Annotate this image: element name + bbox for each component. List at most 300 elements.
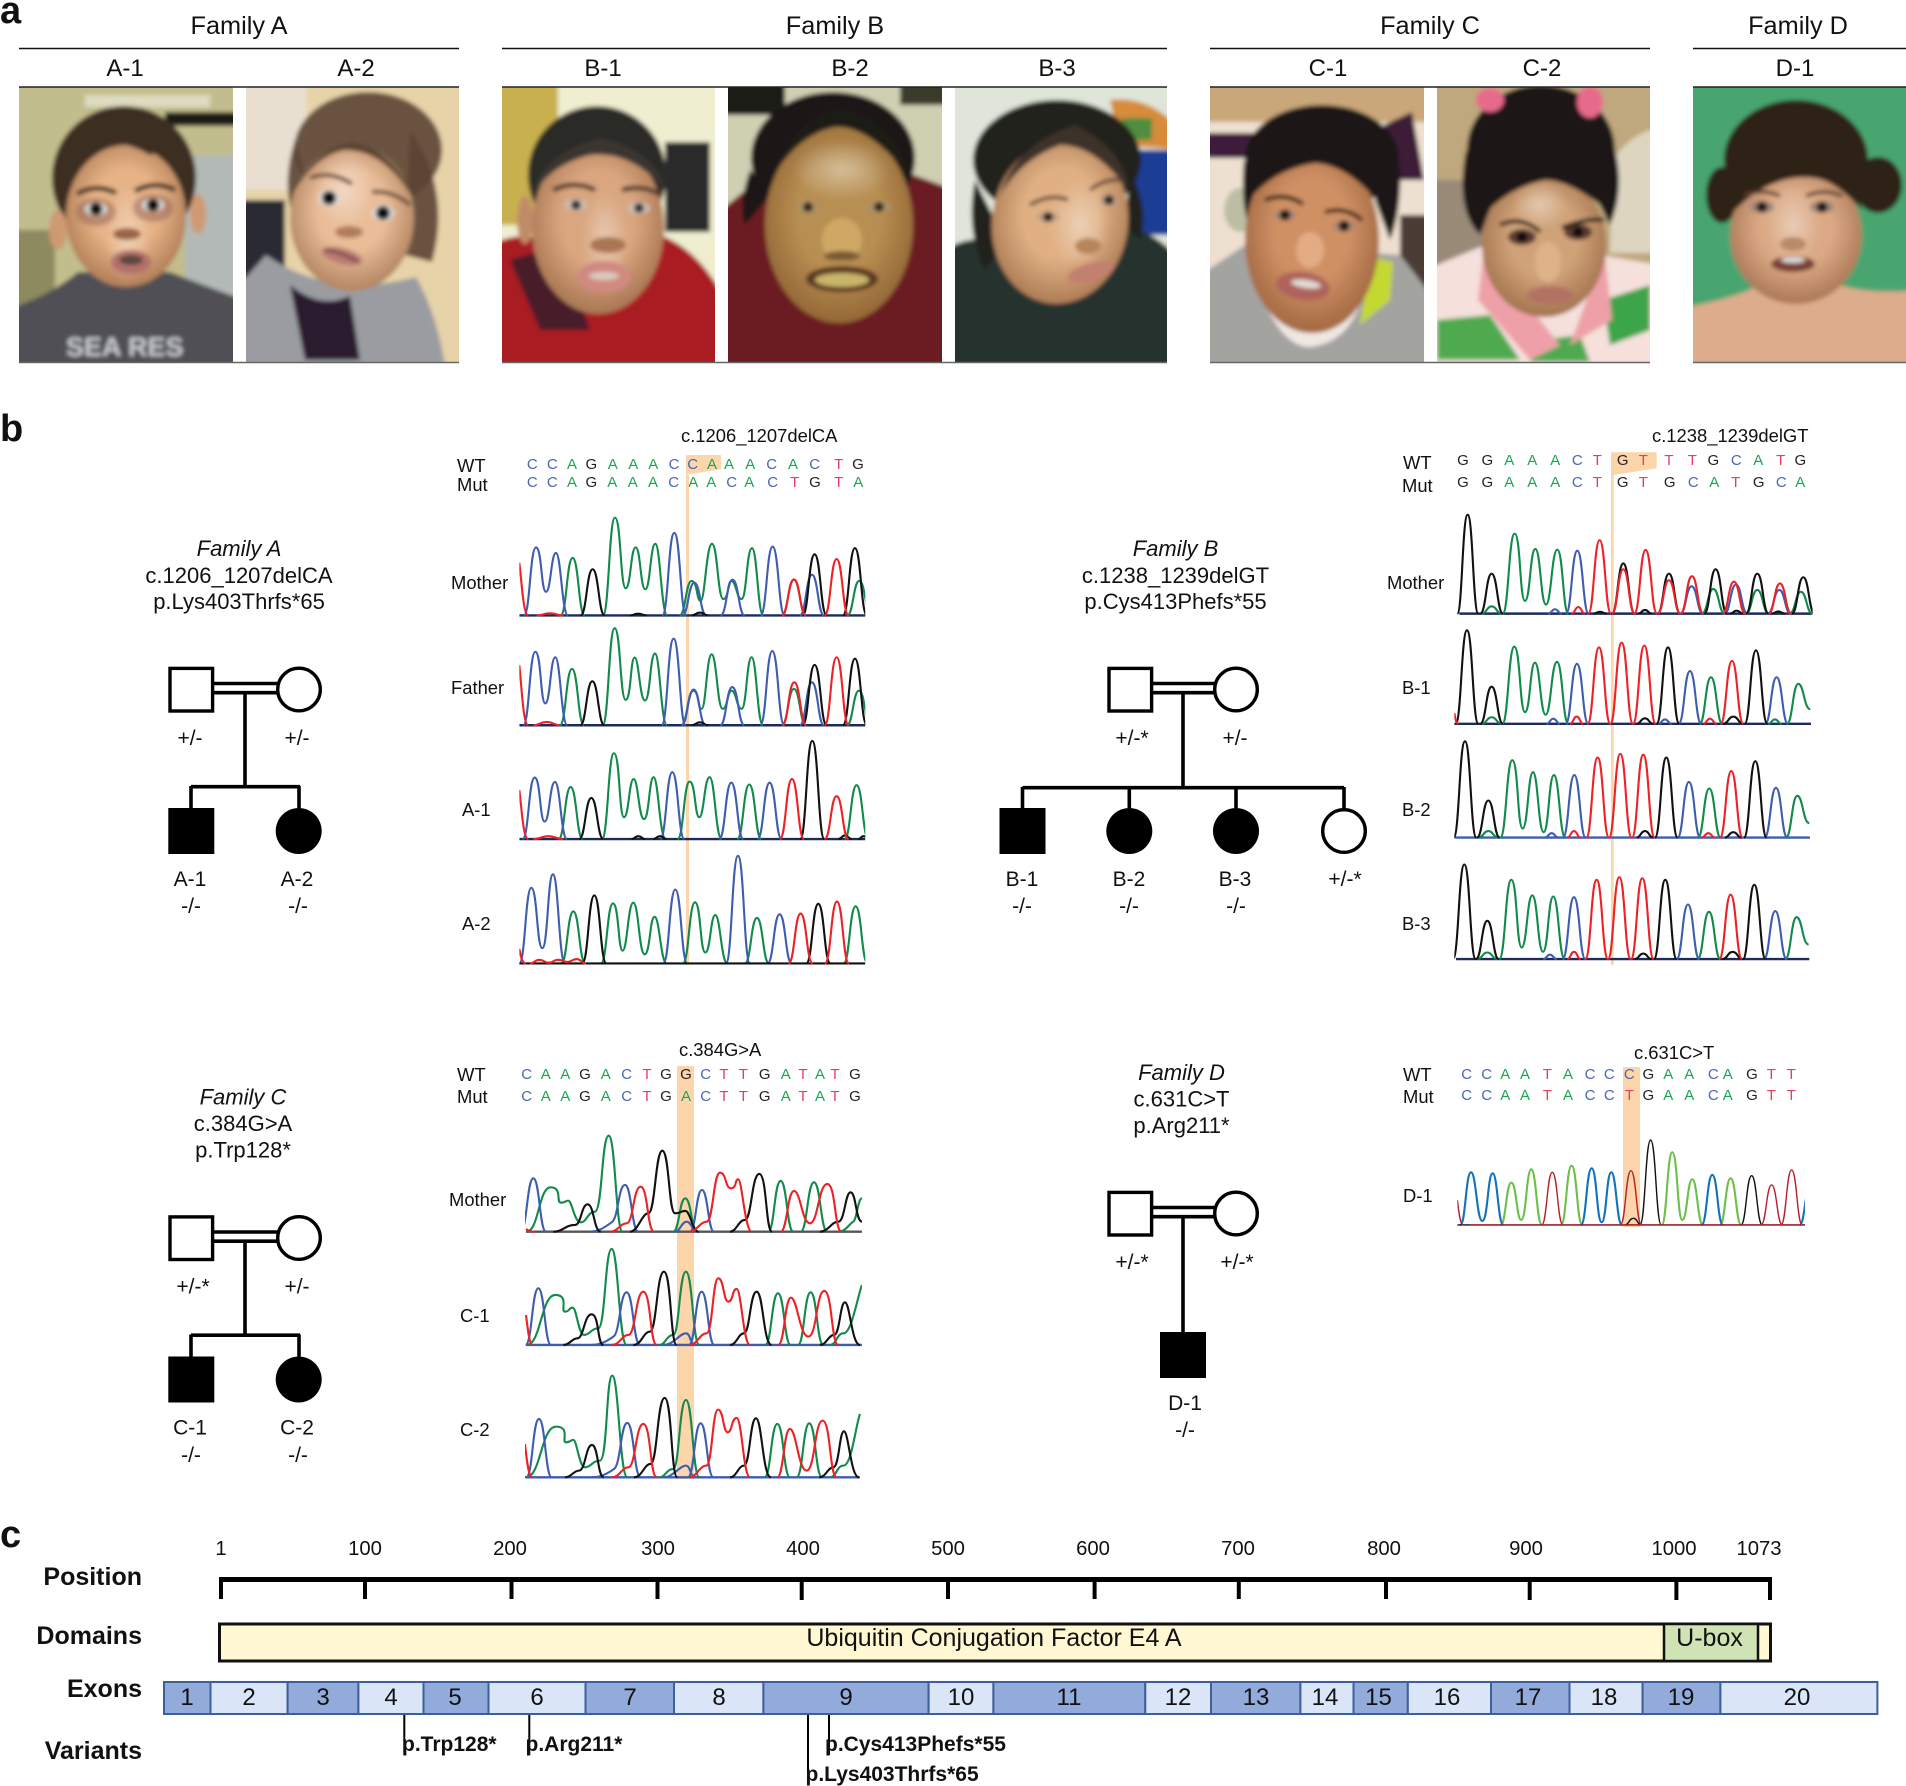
sequence alignment: Family A: G <box>852 456 864 473</box>
sequence alignment: Family A: A <box>648 474 658 491</box>
sequence alignment: Family A: A <box>788 456 798 473</box>
sequence alignment: Family C: G <box>680 1066 692 1083</box>
sequence alignment: Family D: T <box>1787 1066 1796 1083</box>
exon bar: 14 <box>1312 1684 1338 1711</box>
sequence alignment: Family D: Mut <box>1403 1086 1434 1107</box>
sequence alignment: Family C: G <box>849 1066 861 1083</box>
sequence alignment: Family A: A <box>688 474 698 491</box>
sequence alignment: Family C: G <box>759 1066 771 1083</box>
mutation text: Family B: c.1238_1239delGT <box>1082 563 1269 588</box>
sequence alignment: Family C: C <box>521 1066 532 1083</box>
pedigree: Family D: D-1 <box>1168 1392 1202 1415</box>
sequence alignment: Family C: C <box>700 1088 711 1105</box>
pedigree: Family C: +/- <box>284 1276 310 1298</box>
pedigree: Family A: +/- <box>177 727 203 750</box>
exon bar: 1 <box>180 1684 194 1711</box>
sequence alignment: Family A: C <box>547 474 558 491</box>
trace labels: Family A: A-1 <box>462 799 491 820</box>
sequence alignment: Family A <box>457 425 864 495</box>
pedigree: Family C: -/- <box>288 1444 308 1467</box>
exon bar: 20 <box>1784 1684 1810 1711</box>
variant: p.Cys413Phefs*55: p.Cys413Phefs*55 <box>825 1733 1006 1756</box>
highlight strip: Family D <box>1623 1067 1640 1227</box>
sequence alignment: Family D: T <box>1767 1066 1776 1083</box>
heading: Family C: Family C <box>1380 12 1480 40</box>
position ruler: 800 <box>1367 1538 1401 1560</box>
sequence alignment: Family B: T <box>1688 452 1697 469</box>
sequence alignment: Family A: C <box>547 456 558 473</box>
position ruler: 1073 <box>1736 1538 1782 1560</box>
pedigree: Family B: B-3 <box>1219 868 1251 891</box>
sequence alignment: Family A: C <box>527 456 538 473</box>
mutation text: Family D <box>1133 1060 1230 1138</box>
individual labels <box>106 55 1814 82</box>
position ruler: 100 <box>348 1538 382 1560</box>
variant: p.Arg211* <box>526 1715 623 1756</box>
sequence alignment: Family A: A <box>607 474 617 491</box>
variant: p.Trp128* <box>402 1715 497 1756</box>
highlight strip: Family B <box>1611 475 1614 965</box>
individual labels: C-2 <box>1523 55 1561 82</box>
sequence alignment: Family D: C <box>1585 1066 1596 1083</box>
sequence alignment: Family C: C <box>621 1066 632 1083</box>
panel b: pedigrees and chromatograms <box>0 408 1815 1479</box>
exon bar: 4 <box>384 1684 398 1711</box>
mutation text: Family B: Family B <box>1133 536 1218 561</box>
sequence alignment: Family D: c.631C>T <box>1634 1042 1714 1063</box>
sequence alignment: Family C: G <box>849 1088 861 1105</box>
position ruler: 700 <box>1221 1538 1255 1560</box>
individual labels: C-1 <box>1309 55 1347 82</box>
exon bar: 8 <box>712 1684 726 1711</box>
position ruler: 300 <box>641 1538 675 1560</box>
mutation text: Family A: p.Lys403Thrfs*65 <box>153 589 325 614</box>
trace: B-2 <box>1454 741 1810 838</box>
pedigree: Family A: A-2 <box>281 868 313 891</box>
sequence alignment: Family A: A <box>648 456 658 473</box>
position ruler: 600 <box>1076 1538 1110 1560</box>
sequence alignment: Family B: c.1238_1239delGT <box>1652 425 1808 447</box>
heading: Family B: Family B <box>786 12 884 40</box>
sequence alignment: Family C: T <box>798 1088 808 1105</box>
sequence alignment: Family D: A <box>1500 1066 1510 1083</box>
trace labels: Family C <box>449 1189 506 1440</box>
sequence alignment: Family A: A <box>567 456 577 473</box>
sequence alignment: Family B: C <box>1731 452 1742 469</box>
pedigree: Family B: -/- <box>1226 895 1246 918</box>
sequence alignment: Family A: T <box>834 474 843 491</box>
heading: Family A: Family A <box>190 12 288 40</box>
pedigree: Family D <box>1109 1192 1257 1442</box>
sequence alignment: Family C: A <box>560 1088 570 1105</box>
mutation text: Family B <box>1082 536 1269 614</box>
sequence alignment: Family A: A <box>744 474 754 491</box>
heading: Family D: Family D <box>1748 12 1848 40</box>
sequence alignment: Family D: T <box>1625 1087 1634 1104</box>
pedigree: Family A: -/- <box>181 895 201 918</box>
sequence alignment: Family A: WT <box>457 455 486 476</box>
sequence alignment: Family D: WT <box>1403 1064 1432 1085</box>
sequence alignment: Family D: A <box>1520 1066 1530 1083</box>
sequence alignment: Family D: C <box>1461 1087 1472 1104</box>
position ruler <box>215 1538 1782 1600</box>
sequence alignment: Family B: T <box>1639 474 1648 491</box>
exon bar: 19 <box>1668 1684 1694 1711</box>
sequence alignment: Family C: C <box>700 1066 711 1083</box>
sequence alignment: Family D: A <box>1563 1066 1573 1083</box>
pedigree: Family C <box>168 1217 322 1467</box>
sequence alignment: Family C: T <box>798 1066 808 1083</box>
sequence alignment: Family B: G <box>1617 452 1629 469</box>
sequence alignment: Family D: T <box>1787 1087 1796 1104</box>
trace: B-3 <box>1453 864 1809 959</box>
sequence alignment: Family C: T <box>830 1066 840 1083</box>
sequence alignment: Family A: C <box>766 456 777 473</box>
sequence alignment: Family D: A <box>1723 1087 1733 1104</box>
sequence alignment: Family B: A <box>1753 452 1763 469</box>
sequence alignment: Family C: T <box>642 1088 652 1105</box>
sequence alignment: Family C: WT <box>457 1064 486 1085</box>
trace: B-1 <box>1454 630 1811 724</box>
sequence alignment: Family C: T <box>739 1066 748 1083</box>
sequence alignment: Family C: A <box>781 1088 791 1105</box>
sequence alignment: Family B: C <box>1776 474 1787 491</box>
sequence alignment: Family D: A <box>1563 1087 1573 1104</box>
variant: p.Arg211*: p.Arg211* <box>526 1733 623 1756</box>
sequence alignment: Family A: A <box>706 474 716 491</box>
trace labels: Family A: Mother <box>451 572 508 593</box>
sequence alignment: Family B: G <box>1664 474 1676 491</box>
trace labels: Family B: B-3 <box>1402 913 1431 934</box>
sequence alignment: Family C: T <box>642 1066 652 1083</box>
pedigree: Family B: -/- <box>1119 895 1139 918</box>
position ruler: 500 <box>931 1538 965 1560</box>
trace: C-1 <box>526 1249 862 1345</box>
individual labels: B-2 <box>831 55 869 82</box>
sequence alignment: Family B: T <box>1593 452 1602 469</box>
sequence alignment: Family D: A <box>1500 1087 1510 1104</box>
position ruler: 200 <box>493 1538 527 1560</box>
sequence alignment: Family A: G <box>809 474 821 491</box>
sequence alignment: Family A: T <box>834 456 843 473</box>
sequence alignment: Family C: A <box>781 1066 791 1083</box>
trace labels: Family B: B-1 <box>1402 677 1431 698</box>
row labels: Domains <box>36 1622 142 1650</box>
row labels: Variants <box>45 1737 142 1765</box>
exon bar: 17 <box>1515 1684 1541 1711</box>
sequence alignment: Family A: A <box>707 456 717 473</box>
mutation text: Family D: p.Arg211* <box>1133 1113 1230 1138</box>
sequence alignment: Family D: A <box>1663 1066 1673 1083</box>
exon bar: 16 <box>1434 1684 1460 1711</box>
sequence alignment: Family A: T <box>790 474 799 491</box>
sequence alignment: Family D: G <box>1642 1066 1654 1083</box>
exon bar: 15 <box>1365 1684 1392 1711</box>
sequence alignment: Family B: A <box>1504 452 1514 469</box>
sequence alignment: Family D: C <box>1481 1087 1492 1104</box>
panel letter b: b <box>0 408 23 450</box>
sequence alignment: Family D: A <box>1663 1087 1673 1104</box>
pedigree: Family C: C-1 <box>173 1416 207 1440</box>
trace labels: Family B: B-2 <box>1402 799 1431 820</box>
mutation text: Family C: p.Trp128* <box>195 1138 291 1162</box>
photo: B-2 <box>728 88 942 362</box>
sequence alignment: Family B: A <box>1550 452 1560 469</box>
individual labels: B-1 <box>584 55 622 82</box>
sequence alignment: Family A: A <box>628 474 638 491</box>
sequence alignment: Family C: C <box>621 1088 632 1105</box>
pedigree: Family B: +/- <box>1222 727 1248 750</box>
sequence alignment: Family C: G <box>660 1066 672 1083</box>
trace labels: Family C: C-2 <box>460 1419 490 1440</box>
individual labels: A-1 <box>106 55 144 82</box>
row labels <box>36 1563 142 1765</box>
sequence alignment: Family A: C <box>527 474 538 491</box>
photo: A-1: SEA RES <box>66 332 184 362</box>
sequence alignment: Family B: G <box>1617 474 1629 491</box>
sequence alignment: Family C: T <box>719 1066 729 1083</box>
mutation text: Family D: Family D <box>1138 1060 1225 1085</box>
sequence alignment: Family A: C <box>809 456 820 473</box>
position ruler: 1000 <box>1651 1538 1697 1560</box>
sequence alignment: Family B: Mut <box>1402 475 1433 496</box>
chromatograms: Family C <box>521 1136 862 1477</box>
sequence alignment: Family D: A <box>1723 1066 1733 1083</box>
sequence alignment: Family D: C <box>1624 1066 1635 1083</box>
sequence alignment: Family B: G <box>1707 452 1719 469</box>
exon bar: 5 <box>448 1684 462 1711</box>
sequence alignment: Family A: C <box>687 456 698 473</box>
pedigree: Family B <box>1000 668 1365 918</box>
sequence alignment: Family C: T <box>719 1088 729 1105</box>
pedigree: Family D: -/- <box>1175 1419 1195 1442</box>
sequence alignment: Family C: G <box>660 1088 672 1105</box>
position ruler: 900 <box>1509 1538 1543 1560</box>
sequence alignment: Family C: C <box>521 1088 532 1105</box>
sequence alignment: Family C: A <box>560 1066 570 1083</box>
sequence alignment: Family D: C <box>1708 1066 1719 1083</box>
mutation text: Family C <box>194 1084 293 1162</box>
sequence alignment: Family B: A <box>1795 474 1805 491</box>
sequence alignment: Family B: C <box>1572 474 1583 491</box>
trace: A-2 <box>519 856 868 963</box>
sequence alignment: Family C: G <box>579 1066 591 1083</box>
exon bar: 3 <box>316 1684 330 1711</box>
photo frame lines <box>19 87 1906 362</box>
chromatograms: Family B <box>1453 515 1815 959</box>
individual labels: B-3 <box>1038 55 1076 82</box>
pedigree: Family D: +/-* <box>1220 1251 1254 1274</box>
sequence alignment: Family B: T <box>1731 474 1740 491</box>
trace: Mother <box>521 1136 862 1232</box>
pedigree: Family B: +/-* <box>1328 868 1362 891</box>
sequence alignment: Family D: G <box>1746 1087 1758 1104</box>
mutation text: Family A: c.1206_1207delCA <box>145 563 333 588</box>
trace labels: Family A: Father <box>451 677 504 698</box>
sequence alignment: Family B: A <box>1527 452 1537 469</box>
sequence alignment: Family A: A <box>608 456 618 473</box>
sequence alignment: Family D: A <box>1520 1087 1530 1104</box>
position ruler: 400 <box>786 1538 820 1560</box>
mutation text: Family D: c.631C>T <box>1134 1086 1230 1112</box>
pedigree: Family B: B-2 <box>1113 868 1145 891</box>
sequence alignment: Family B: A <box>1709 474 1719 491</box>
sequence alignment: Family D: A <box>1684 1066 1694 1083</box>
highlight strip: Family C <box>677 1066 694 1479</box>
sequence alignment: Family A: C <box>668 474 679 491</box>
row labels: Exons <box>67 1675 142 1703</box>
exon bar: 6 <box>530 1684 544 1711</box>
sequence alignment: Family B: G <box>1481 474 1493 491</box>
sequence alignment: Family C: T <box>830 1088 840 1105</box>
sequence alignment: Family C: A <box>541 1066 551 1083</box>
pedigree: Family B: -/- <box>1012 895 1032 918</box>
sequence alignment: Family C: A <box>601 1088 611 1105</box>
sequence alignment: Family B: G <box>1457 474 1469 491</box>
sequence alignment: Family B <box>1402 425 1808 496</box>
sequence alignment: Family C: A <box>815 1088 825 1105</box>
pedigree: Family A: -/- <box>288 895 308 918</box>
sequence alignment: Family A: C <box>669 456 680 473</box>
sequence alignment: Family C: A <box>681 1088 691 1105</box>
trace labels: Family C: Mother <box>449 1189 506 1210</box>
panel a: patient photographs <box>0 0 1906 375</box>
exon bar: 2 <box>242 1684 256 1711</box>
chromatograms: Family A <box>519 518 871 963</box>
domain: U-box <box>1664 1624 1758 1661</box>
sequence alignment: Family B: G <box>1457 452 1469 469</box>
sequence alignment: Family A: G <box>585 456 597 473</box>
sequence alignment: Family A: A <box>628 456 638 473</box>
sequence alignment: Family B: A <box>1550 474 1560 491</box>
trace labels: Family C: C-1 <box>460 1305 490 1326</box>
photo: B-1 <box>502 88 715 362</box>
sequence alignment: Family D: G <box>1642 1087 1654 1104</box>
sequence alignment: Family B: A <box>1504 474 1514 491</box>
pedigree: Family A <box>168 668 322 918</box>
pedigree: Family C: -/- <box>181 1444 201 1467</box>
sequence alignment: Family B: G <box>1481 452 1493 469</box>
exon bar: 7 <box>623 1684 637 1711</box>
photo: B-3 <box>955 88 1167 362</box>
exon bar: 12 <box>1165 1684 1191 1711</box>
photo: A-1 <box>19 88 233 362</box>
pedigree: Family D: +/-* <box>1115 1251 1149 1274</box>
mutation text: Family A: Family A <box>197 536 281 561</box>
sequence alignment: Family A: G <box>585 474 597 491</box>
sequence alignment: Family B: G <box>1753 474 1765 491</box>
trace: A-1 <box>519 741 870 839</box>
sequence alignment: Family D: C <box>1585 1087 1596 1104</box>
sequence alignment: Family D: T <box>1767 1087 1776 1104</box>
exon bar: 9 <box>839 1684 853 1711</box>
sequence alignment: Family B: WT <box>1403 452 1432 473</box>
panel letter c: c <box>0 1514 21 1556</box>
pedigree: Family A: +/- <box>284 727 310 750</box>
sequence alignment: Family B: T <box>1639 452 1648 469</box>
sequence alignment: Family D: A <box>1684 1087 1694 1104</box>
sequence alignment: Family A: C <box>726 474 737 491</box>
sequence alignment: Family A: A <box>853 474 863 491</box>
sequence alignment: Family B: T <box>1593 474 1602 491</box>
sequence alignment: Family A: A <box>745 456 755 473</box>
sequence alignment: Family B: T <box>1664 452 1674 469</box>
sequence alignment: Family C: G <box>579 1088 591 1105</box>
domain: Ubiquitin Conjugation Factor E4 A: Ubiquitin Conjugation Factor E4 A <box>806 1624 1182 1652</box>
mutation text: Family A <box>145 536 333 614</box>
sequence alignment: Family D: C <box>1708 1087 1719 1104</box>
photo: C-1 <box>1210 88 1424 362</box>
trace labels: Family A <box>451 572 508 934</box>
sequence alignment: Family A: c.1206_1207delCA <box>681 425 838 447</box>
sequence alignment: Family B: C <box>1572 452 1583 469</box>
pedigree: Family B: +/-* <box>1115 727 1149 750</box>
sequence alignment: Family D <box>1403 1042 1796 1107</box>
domain bar <box>220 1624 1770 1661</box>
sequence alignment: Family A: C <box>767 474 778 491</box>
chromatogram: D-1 <box>1457 1140 1806 1225</box>
sequence alignment: Family B: T <box>1776 452 1785 469</box>
sequence alignment: Family C <box>457 1039 861 1107</box>
trace labels: Family B: Mother <box>1387 572 1444 593</box>
pedigree: Family A: A-1 <box>174 868 206 891</box>
sequence alignment: Family B: C <box>1688 474 1699 491</box>
variant: p.Trp128*: p.Trp128* <box>402 1733 497 1756</box>
sequence alignment: Family B: A <box>1527 474 1537 491</box>
trace labels: Family B <box>1387 572 1444 934</box>
sequence alignment: Family C: A <box>601 1066 611 1083</box>
sequence alignment: Family D: T <box>1543 1087 1552 1104</box>
photo: D-1 <box>1693 88 1906 362</box>
sequence alignment: Family D: C <box>1604 1066 1615 1083</box>
panel c: protein and exon diagram <box>0 1514 1877 1786</box>
trace: Mother <box>519 518 871 615</box>
mutation text: Family C: Family C <box>200 1084 286 1110</box>
exon bar: 11 <box>1057 1684 1081 1711</box>
exon bar: 13 <box>1243 1684 1269 1711</box>
mutation text: Family B: p.Cys413Phefs*55 <box>1084 589 1267 614</box>
trace label: D-1: D-1 <box>1403 1185 1433 1206</box>
sequence alignment: Family C: c.384G>A <box>679 1039 762 1060</box>
sequence alignment: Family D: C <box>1604 1087 1615 1104</box>
trace labels: Family A: A-2 <box>462 913 491 934</box>
photo: A-2 <box>246 88 459 362</box>
trace: Mother <box>1457 515 1815 614</box>
pedigree: Family C: C-2 <box>280 1416 314 1440</box>
sequence alignment: Family B: G <box>1794 452 1806 469</box>
sequence alignment: Family A: Mut <box>457 474 488 495</box>
sequence alignment: Family C: A <box>541 1088 551 1105</box>
position ruler: 1 <box>215 1538 227 1560</box>
highlight strip: Family A <box>686 475 689 965</box>
exon bar: 10 <box>948 1684 974 1711</box>
trace: C-2 <box>525 1376 860 1477</box>
sequence alignment: Family A: A <box>567 474 577 491</box>
sequence alignment: Family D: C <box>1461 1066 1472 1083</box>
pedigree: Family B: B-1 <box>1006 868 1038 891</box>
trace: Father <box>519 628 871 725</box>
row labels: Position <box>43 1563 142 1591</box>
sequence alignment: Family C: T <box>739 1088 748 1105</box>
variant: p.Lys403Thrfs*65: p.Lys403Thrfs*65 <box>806 1763 979 1786</box>
sequence alignment: Family A: A <box>724 456 734 473</box>
sequence alignment: Family C: Mut <box>457 1086 488 1107</box>
exon bar: 18 <box>1591 1684 1617 1711</box>
sequence alignment: Family D: C <box>1481 1066 1492 1083</box>
sequence alignment: Family C: G <box>759 1088 771 1105</box>
sequence alignment: Family D: G <box>1746 1066 1758 1083</box>
sequence alignment: Family D: T <box>1543 1066 1552 1083</box>
